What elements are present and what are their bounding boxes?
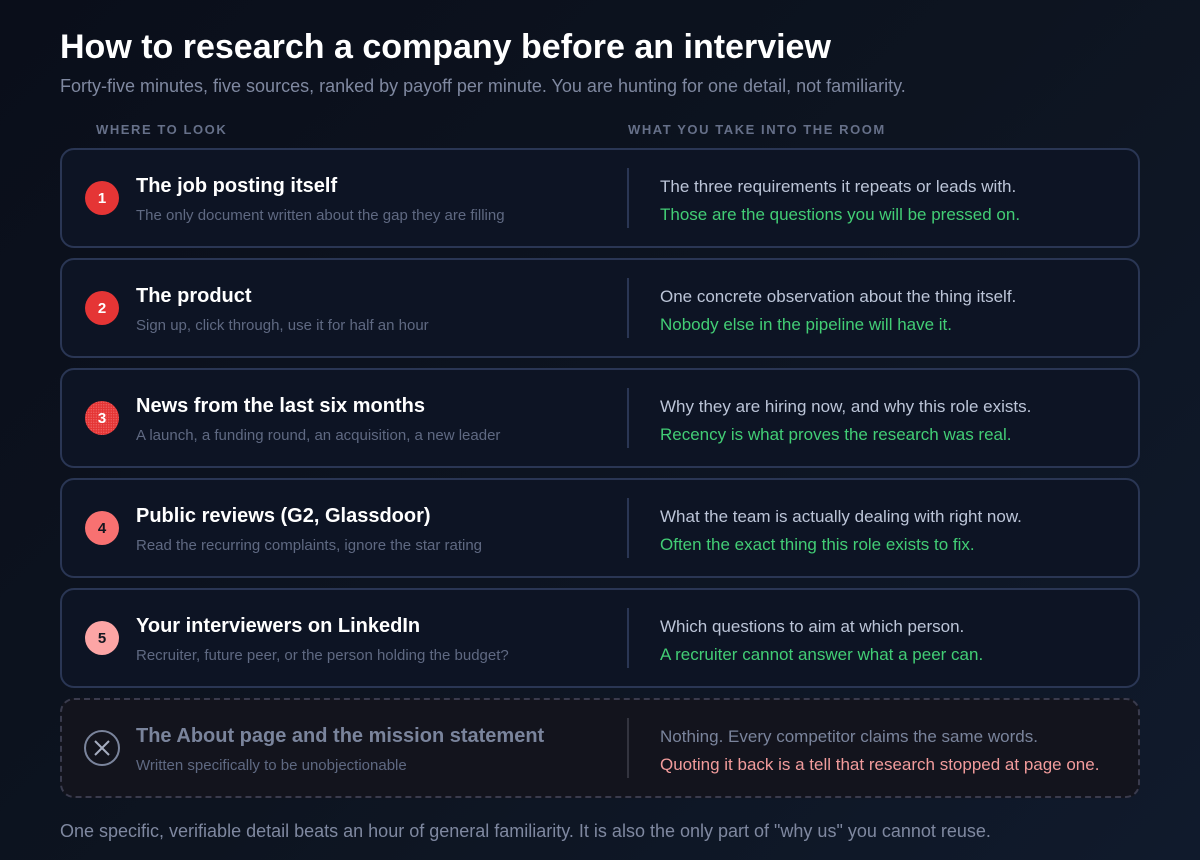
takeaway: Which questions to aim at which person. <box>660 617 964 636</box>
why it matters: Those are the questions you will be pressed on. <box>660 205 1020 224</box>
why it matters: Nobody else in the pipeline will have it. <box>660 315 952 334</box>
source name: The job posting itself <box>136 175 337 197</box>
rank badge 4 <box>85 511 119 545</box>
source note: Written specifically to be unobjectionable <box>136 757 407 774</box>
column heading: where to look: WHERE TO LOOK <box>96 122 227 137</box>
source note: The only document written about the gap they are filling <box>136 207 505 224</box>
rank badge 2 <box>85 291 119 325</box>
footer note: One specific, verifiable detail beats an hour of general familiarity. It is also the only part of "why us" you cannot reuse. <box>60 821 991 841</box>
source note: A launch, a funding round, an acquisition, a new leader <box>136 427 500 444</box>
rank badge 1: 1 <box>98 190 106 207</box>
takeaway: What the team is actually dealing with right now. <box>660 507 1022 526</box>
source note: Read the recurring complaints, ignore the star rating <box>136 537 482 554</box>
panel: source 2 product <box>60 258 1140 358</box>
source name: Your interviewers on LinkedIn <box>136 615 420 637</box>
rank badge 3: 3 <box>98 410 106 427</box>
why it matters: Often the exact thing this role exists to fix. <box>660 535 975 554</box>
rank badge 1 <box>85 181 119 215</box>
warning: Quoting it back is a tell that research stopped at page one. <box>660 755 1099 774</box>
rank badge 5: 5 <box>98 630 106 647</box>
why it matters: Recency is what proves the research was real. <box>660 425 1012 444</box>
panel: source 4 reviews <box>60 478 1140 578</box>
panel: source 5 interviewers <box>60 588 1140 688</box>
source name: The About page and the mission statement <box>136 725 544 747</box>
column heading: what you take into the room: WHAT YOU TAKE INTO THE ROOM <box>628 122 886 137</box>
panel: what to skip, about page <box>60 698 1140 798</box>
subtitle: Forty-five minutes, five sources, ranked by payoff per minute. You are hunting for one detail, not familiarity. <box>60 76 906 96</box>
rank badge 2: 2 <box>98 300 106 317</box>
source name: News from the last six months <box>136 395 425 417</box>
takeaway: One concrete observation about the thing itself. <box>660 287 1016 306</box>
panel: source 3 news <box>60 368 1140 468</box>
source name: The product <box>136 285 252 307</box>
rank badge 4: 4 <box>98 520 106 537</box>
rank badge 3 <box>85 401 119 435</box>
title: How to research a company before an interview <box>60 28 831 66</box>
source name: Public reviews (G2, Glassdoor) <box>136 505 431 527</box>
takeaway: Why they are hiring now, and why this role exists. <box>660 397 1031 416</box>
takeaway: The three requirements it repeats or leads with. <box>660 177 1016 196</box>
rank badge 5 <box>85 621 119 655</box>
source note: Sign up, click through, use it for half an hour <box>136 317 429 334</box>
why it matters: A recruiter cannot answer what a peer can. <box>660 645 983 664</box>
takeaway: Nothing. Every competitor claims the same words. <box>660 727 1038 746</box>
icon: crossed circle <box>84 730 120 766</box>
source note: Recruiter, future peer, or the person holding the budget? <box>136 647 509 664</box>
panel: source 1 job posting <box>60 148 1140 248</box>
